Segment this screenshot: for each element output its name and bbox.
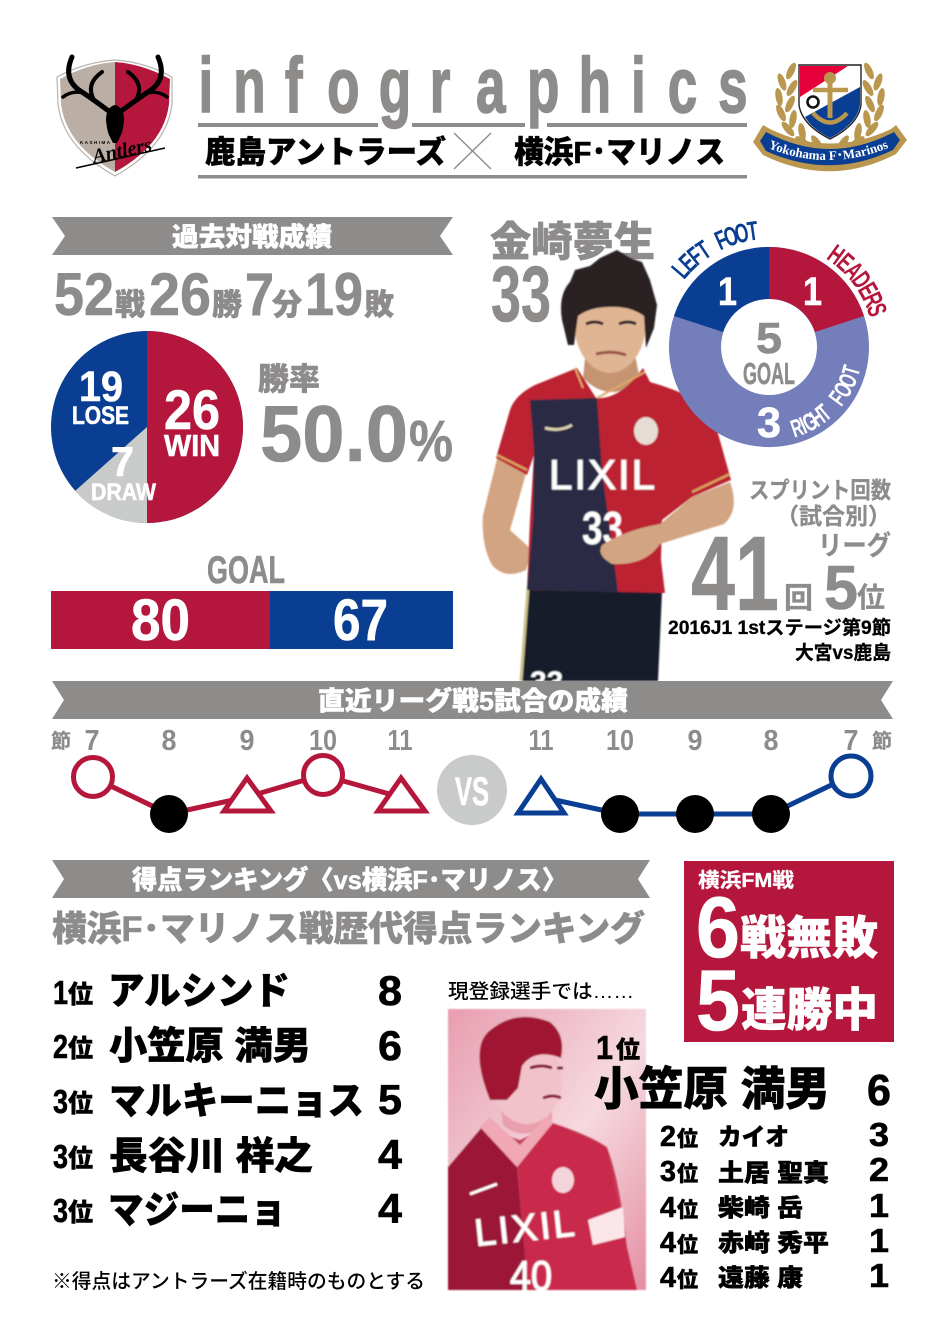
round numbers: 9 — [688, 725, 702, 757]
neck — [583, 340, 640, 392]
label: left foot: O — [731, 216, 752, 249]
label: right foot: F — [824, 387, 852, 411]
overall record line: 26 — [149, 261, 211, 328]
win rate: 50.0 — [260, 389, 408, 478]
goal comparison bar — [51, 549, 453, 653]
callout: unbeaten and winning streak: 5 — [696, 953, 740, 1049]
round numbers: 節 — [872, 730, 892, 753]
panel: sprint count stat: 41 — [691, 515, 779, 633]
ranking rows: 3 — [53, 1138, 68, 1175]
ranking rows: アルシンド — [108, 971, 290, 1013]
rank 2-4 rows: 2 — [660, 1121, 676, 1153]
heading: current players: 現登録選手では…… — [448, 980, 634, 1003]
panel: sprint count stat — [668, 477, 891, 664]
rank 2-4 rows: 位 — [677, 1234, 698, 1257]
round numbers: 7 — [84, 725, 100, 757]
head and hair — [574, 271, 646, 373]
callout: unbeaten and winning streak: 横浜FM戦 — [698, 869, 794, 892]
banner: last 5 matches — [52, 681, 893, 719]
ranking subtitle: 横浜F･マリノス戦歴代得点ランキング — [52, 909, 645, 949]
panel: sprint count stat: リーグ — [818, 530, 891, 561]
rank 2-4 rows: 3 — [660, 1156, 676, 1188]
label: headers: E — [831, 247, 860, 277]
player photo: Ogasawara Mitsuo — [448, 1009, 646, 1299]
label: left foot: E — [672, 247, 702, 278]
label: headers: E — [852, 277, 885, 302]
match-up heading: 横浜F･マリノス — [514, 135, 725, 170]
ranking rows — [53, 967, 403, 1232]
label: left foot: O — [719, 219, 742, 253]
label: headers: R — [857, 287, 890, 312]
callout: unbeaten and winning streak: 戦無敗 — [740, 912, 878, 964]
ranking rows: 5 — [378, 1076, 402, 1123]
ranking rows: 位 — [68, 1090, 93, 1118]
panel: sprint count stat: 5 — [824, 554, 858, 623]
round numbers: 7 — [844, 725, 858, 757]
callout: unbeaten and winning streak: 連勝中 — [741, 984, 878, 1036]
ranking rows: マルキーニョス — [109, 1081, 364, 1123]
label: left foot: T — [690, 234, 716, 265]
label: headers: S — [861, 299, 894, 320]
banner: past record — [52, 217, 453, 255]
round numbers — [51, 725, 892, 757]
VS badge — [437, 755, 507, 825]
donut chart: goal types — [665, 214, 894, 447]
footnote: ※得点はアントラーズ在籍時のものとする — [52, 1270, 425, 1293]
overall record line: 19 — [305, 261, 363, 328]
banner: scorer ranking — [52, 860, 650, 898]
pie chart: win draw lose: LOSE — [72, 402, 129, 430]
right arm — [600, 482, 734, 564]
left arm — [483, 455, 532, 574]
overall record line: 敗 — [364, 289, 394, 322]
shorts — [522, 588, 662, 681]
banner: past record: 過去対戦成績 — [172, 222, 332, 252]
donut chart: goal types: 1 — [718, 270, 737, 314]
rank 2-4 rows — [660, 1116, 889, 1294]
round numbers: 11 — [528, 725, 554, 757]
callout: unbeaten and winning streak — [684, 861, 894, 1049]
pie chart: win draw lose: DRAW — [91, 479, 156, 506]
rank 2-4 rows: 位 — [677, 1128, 698, 1151]
overall record line: 7 — [245, 261, 274, 328]
round numbers: 節 — [51, 730, 71, 753]
label: left foot: T — [745, 214, 760, 247]
label: headers — [822, 238, 894, 320]
ranking rows: 3 — [53, 1192, 68, 1229]
title: infographics: infographics — [199, 43, 748, 130]
label: left foot: F — [681, 240, 709, 271]
logo: Kashima Antlers crest — [57, 57, 172, 176]
jersey — [496, 368, 731, 593]
pie chart: win draw lose: WIN — [164, 428, 220, 463]
panel: player name and number: 33 — [491, 249, 551, 338]
Kashima results line — [74, 756, 425, 833]
panel: sprint count stat: 位 — [857, 582, 885, 613]
win rate: 勝率 — [258, 362, 320, 397]
label: right foot — [787, 362, 866, 443]
rank 2-4 rows: 位 — [677, 1269, 698, 1292]
ranking rows: 8 — [378, 967, 402, 1014]
logo: Yokohama F. Marinos crest: Yokohama F･Marinos — [770, 140, 888, 160]
ranking rows: 位 — [68, 1035, 93, 1063]
rank 2-4 rows: 1 — [869, 1187, 889, 1224]
ranking rows: 位 — [68, 1199, 93, 1227]
pie chart: win draw lose: 19 — [79, 363, 123, 411]
donut chart: goal types: 5 — [756, 314, 782, 363]
Marinos results line — [518, 756, 871, 833]
rank 2-4 rows: 2 — [869, 1151, 889, 1188]
label: right foot: O — [829, 378, 859, 402]
rank 2-4 rows: 位 — [677, 1199, 698, 1222]
win rate: % — [409, 409, 453, 474]
rank 2-4 rows: 3 — [869, 1116, 889, 1153]
panel: sprint count stat: 2016J1 1stステージ第9節 — [668, 617, 891, 639]
label: headers: D — [846, 266, 878, 294]
rank 2-4 rows: 4 — [660, 1192, 676, 1224]
rank 2-4 rows: 4 — [660, 1262, 676, 1294]
ranking rows: 長谷川 祥之 — [109, 1136, 313, 1178]
label: right foot: R — [787, 414, 807, 443]
round numbers: 9 — [240, 725, 254, 757]
ranking rows: 位 — [68, 981, 93, 1009]
panel: current squad ranking — [448, 980, 891, 1299]
jersey number: 40 — [510, 1252, 552, 1299]
rank 2-4 rows: 4 — [660, 1227, 676, 1259]
rank 1 entry: 1 — [596, 1029, 613, 1066]
rank 2-4 rows: 赤﨑 秀平 — [718, 1230, 829, 1257]
jersey sponsor LIXIL: LIXIL — [473, 1203, 576, 1255]
rank 1 entry — [594, 1029, 891, 1115]
VS badge: VS — [455, 770, 489, 814]
jersey sponsor LIXIL: LIXIL — [549, 451, 655, 498]
rank 1 entry: 6 — [867, 1066, 891, 1115]
panel: sprint count stat: 大宮vs鹿島 — [795, 642, 891, 664]
panel: last 5 league matches — [51, 681, 893, 833]
overall record line: 52 — [54, 261, 114, 328]
overall record line: 勝 — [212, 289, 242, 322]
goal comparison bar: 67 — [333, 588, 388, 653]
goal comparison bar: GOAL — [207, 549, 285, 592]
rank 2-4 rows: カイオ — [718, 1124, 789, 1151]
label: headers: H — [822, 238, 850, 270]
overall record line: 分 — [272, 289, 302, 322]
label: right foot: O — [833, 370, 863, 392]
panel: sprint count stat: スプリント回数 — [749, 477, 891, 503]
label: right foot: T — [812, 399, 837, 427]
ranking rows: 2 — [53, 1028, 68, 1065]
rank 2-4 rows: 1 — [869, 1257, 889, 1294]
ranking rows: 3 — [53, 1083, 68, 1120]
callout: unbeaten and winning streak: 6 — [696, 880, 740, 976]
rank 1 entry: 位 — [616, 1037, 640, 1064]
overall record line: 戦 — [115, 288, 145, 322]
goal comparison bar: 80 — [131, 588, 190, 653]
panel: past head-to-head record — [51, 217, 453, 653]
banner: scorer ranking: 得点ランキング〈vs横浜F･マリノス〉 — [132, 865, 567, 895]
round numbers: 10 — [309, 725, 337, 757]
panel: sprint count stat: 回 — [784, 583, 813, 615]
logo: Kashima Antlers crest: Antlers — [89, 134, 154, 168]
ranking rows: 1 — [53, 974, 68, 1011]
rank 2-4 rows: 柴崎 岳 — [718, 1195, 803, 1222]
ranking rows: 4 — [378, 1131, 403, 1178]
rank 2-4 rows: 1 — [869, 1222, 889, 1259]
panel: sprint count stat: （試合別） — [776, 503, 891, 529]
ranking rows: 位 — [68, 1145, 93, 1173]
ranking rows: 6 — [378, 1022, 402, 1069]
label: right foot: H — [805, 404, 830, 433]
donut chart: goal types: 3 — [757, 399, 781, 447]
label: right foot: G — [798, 408, 822, 438]
logo: Yokohama F. Marinos crest — [753, 62, 907, 172]
panel: player name and number: 金崎夢生 — [490, 219, 655, 265]
match-up heading — [198, 133, 747, 178]
rank 2-4 rows: 遠藤 康 — [718, 1265, 803, 1292]
pie chart: win draw lose — [51, 331, 243, 523]
jersey number: 33 — [582, 502, 623, 554]
label: left foot: F — [710, 223, 732, 256]
pie chart: win draw lose: 26 — [164, 378, 220, 441]
round numbers: 11 — [388, 725, 412, 757]
round numbers: 8 — [162, 725, 176, 757]
label: left foot: L — [665, 256, 696, 284]
rank 1 entry: 小笠原 満男 — [594, 1063, 830, 1115]
player photo: Kanazaki Mu: 33 — [530, 666, 563, 699]
pie chart: win draw lose: 7 — [111, 438, 134, 485]
label: headers: A — [838, 255, 870, 285]
overall record line — [54, 261, 394, 328]
label: right foot: T — [837, 362, 866, 379]
panel: player name and number — [490, 219, 655, 338]
banner: last 5 matches: 直近リーグ戦5試合の成績 — [318, 686, 628, 716]
donut chart: goal types: GOAL — [743, 356, 795, 391]
ranking rows: 小笠原 満男 — [109, 1026, 311, 1068]
panel: all-time scorer ranking — [52, 860, 650, 1293]
logo: Kashima Antlers crest: KASHIMA — [80, 140, 111, 145]
ranking rows: マジーニョ — [108, 1190, 286, 1232]
label: left foot — [665, 214, 760, 284]
donut chart: goal types: 1 — [803, 270, 822, 314]
round numbers: 8 — [764, 725, 778, 757]
rank 2-4 rows: 位 — [677, 1163, 698, 1186]
round numbers: 10 — [606, 725, 634, 757]
rank 2-4 rows: 土居 聖真 — [718, 1160, 829, 1187]
player photo: Kanazaki Mu — [483, 250, 734, 699]
ranking rows: 4 — [378, 1185, 403, 1232]
match-up heading: 鹿島アントラーズ — [205, 135, 446, 170]
win rate — [258, 362, 453, 478]
label: right foot: I — [796, 413, 811, 440]
